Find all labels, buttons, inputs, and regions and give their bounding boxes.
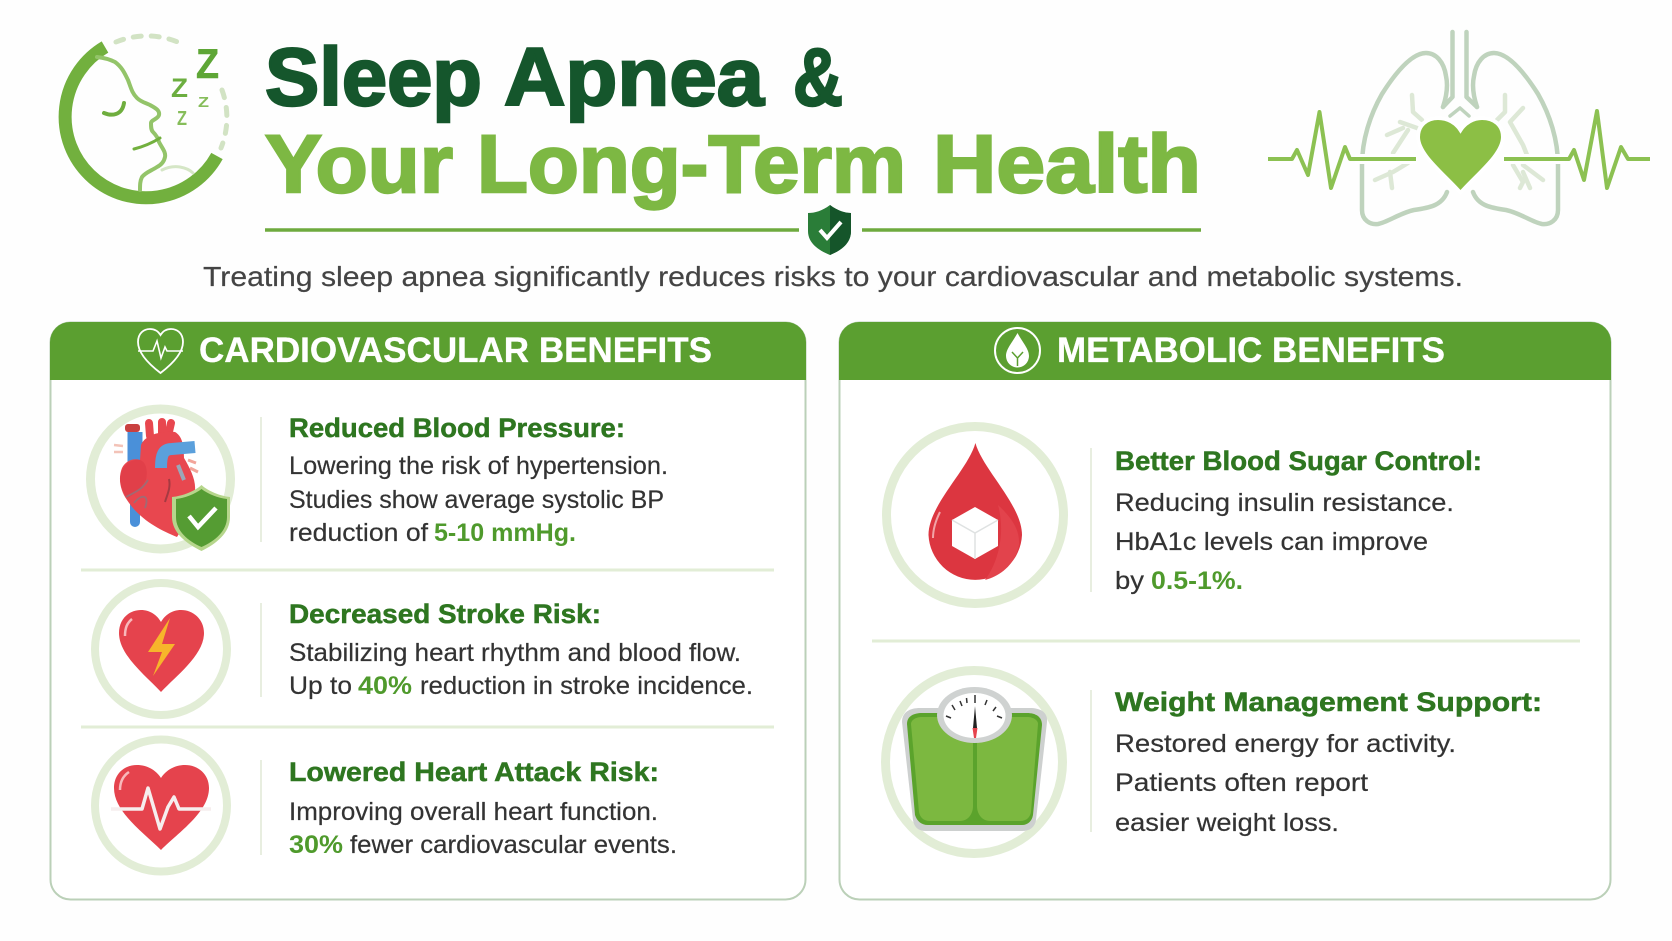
title: Sleep xyxy=(265,32,482,123)
text: decreased stroke risk: Up to xyxy=(289,672,352,700)
text: better blood sugar control: Better Blood Sugar Control: xyxy=(1115,446,1482,476)
title xyxy=(265,32,1201,210)
icon: anatomical heart with shield xyxy=(90,409,230,551)
text: lowered heart attack risk xyxy=(289,757,677,859)
panel: cardiovascular benefits xyxy=(50,322,806,900)
icon: heart with pulse line xyxy=(95,740,227,872)
icon: sleeping face logo: Z xyxy=(196,40,219,87)
text: reduced blood pressure: Lowering the risk of hypertension. xyxy=(289,452,668,480)
text: lowered heart attack risk: fewer cardiovascular events. xyxy=(350,831,677,859)
text: lowered heart attack risk: 30% xyxy=(289,831,343,859)
text: better blood sugar control: by xyxy=(1115,567,1145,595)
icon: weighing scale xyxy=(886,670,1062,854)
text: reduced blood pressure xyxy=(289,413,668,547)
text: lowered heart attack risk: Lowered Heart Attack Risk: xyxy=(289,757,659,787)
text: decreased stroke risk: Stabilizing heart rhythm and blood flow. xyxy=(289,639,741,667)
row: better blood sugar control xyxy=(886,426,1482,604)
text: reduced blood pressure: Studies show average systolic BP xyxy=(289,486,664,514)
text: lowered heart attack risk: Improving overall heart function. xyxy=(289,798,658,826)
text: better blood sugar control: 0.5-1%. xyxy=(1151,567,1243,595)
panel: metabolic benefits xyxy=(839,322,1611,900)
icon: sleeping face logo: Z xyxy=(198,94,209,111)
text: reduced blood pressure: reduction of xyxy=(289,519,428,547)
panel header: metabolic xyxy=(839,322,1611,380)
panel header: cardiovascular: CARDIOVASCULAR BENEFITS xyxy=(199,331,712,370)
text: weight management support: Patients often report xyxy=(1115,769,1368,797)
panel header: metabolic: METABOLIC BENEFITS xyxy=(1057,331,1445,370)
subtitle: Treating sleep apnea significantly reduces risks to your cardiovascular and metabolic systems. xyxy=(203,261,1463,292)
title divider with shield xyxy=(265,205,1201,255)
row: reduced blood pressure xyxy=(90,409,668,551)
text: decreased stroke risk: Decreased Stroke Risk: xyxy=(289,599,601,629)
text: decreased stroke risk: reduction in stroke incidence. xyxy=(420,672,753,700)
text: weight management support: Restored energy for activity. xyxy=(1115,730,1456,758)
text: reduced blood pressure: Reduced Blood Pressure: xyxy=(289,413,625,443)
text: decreased stroke risk xyxy=(289,599,753,700)
text: weight management support xyxy=(1115,687,1542,837)
icon: sleeping face logo: Z xyxy=(171,73,188,103)
text: decreased stroke risk: 40% xyxy=(358,672,412,700)
text: better blood sugar control: Reducing insulin resistance. xyxy=(1115,489,1454,517)
panel header: cardiovascular xyxy=(50,322,806,380)
icon: blood drop with sugar cube xyxy=(886,426,1064,604)
text: better blood sugar control xyxy=(1115,446,1482,595)
title: Health xyxy=(933,119,1201,210)
row: decreased stroke risk xyxy=(95,583,753,715)
text: better blood sugar control: HbA1c levels can improve xyxy=(1115,528,1428,556)
text: reduced blood pressure: 5-10 mmHg. xyxy=(434,519,576,547)
text: weight management support: easier weight loss. xyxy=(1115,809,1339,837)
icon: heart with lightning bolt xyxy=(95,583,227,715)
title: Your xyxy=(265,119,453,210)
title: Apnea xyxy=(504,32,765,123)
text: weight management support: Weight Management Support: xyxy=(1115,687,1542,717)
title: Long-Term xyxy=(477,119,906,210)
icon: sleeping face logo xyxy=(65,36,227,198)
icon: sleeping face logo: Z xyxy=(177,108,187,130)
icon: lungs with heart and ECG xyxy=(1268,32,1650,224)
row: lowered heart attack risk xyxy=(95,740,677,872)
row: weight management support xyxy=(886,670,1542,854)
title: & xyxy=(793,32,843,123)
